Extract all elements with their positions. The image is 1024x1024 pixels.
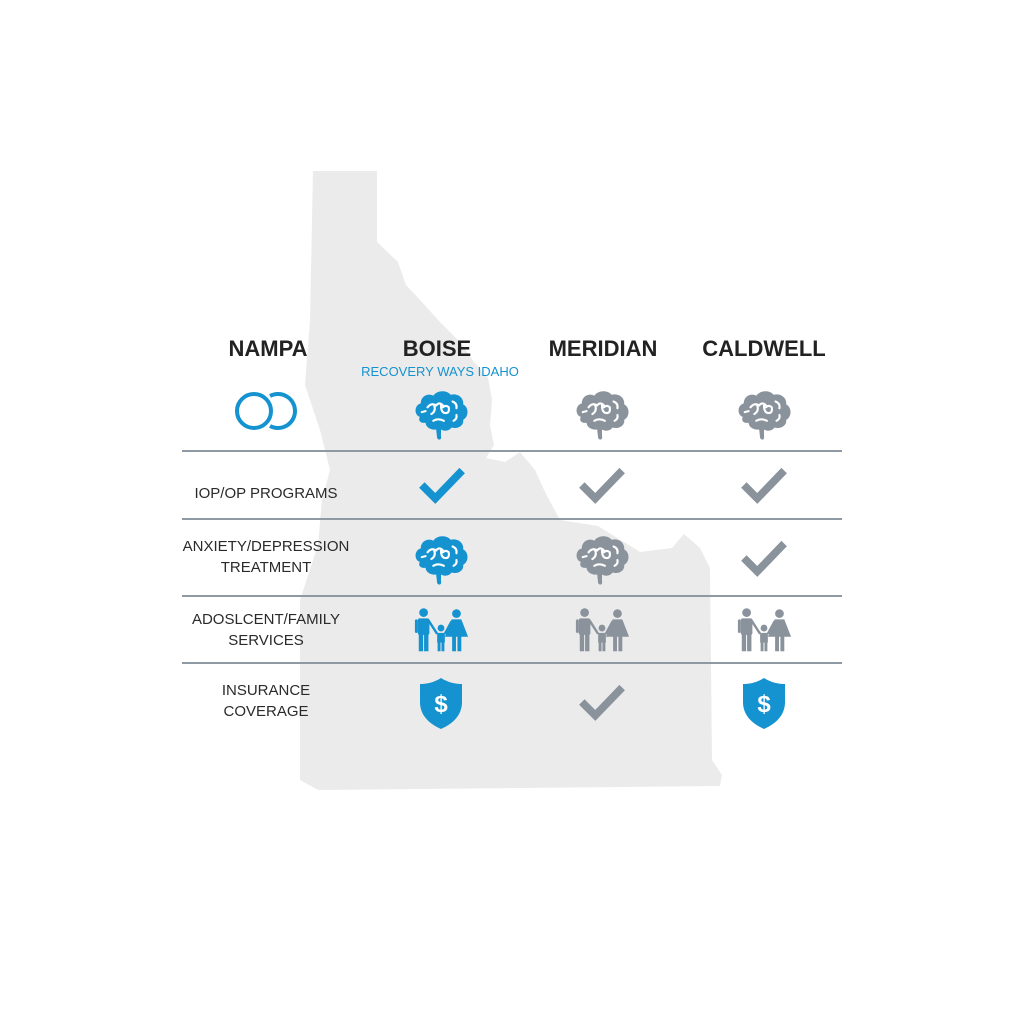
icon: boise family [414, 608, 468, 652]
icon: caldwell brain [738, 391, 790, 440]
icon: boise shield [420, 678, 462, 729]
icon: meridian check [579, 468, 625, 504]
heading: BOISE: BOISE [403, 336, 471, 361]
label: insurance [222, 682, 310, 720]
subheading: Recovery Ways Idaho: RECOVERY WAYS IDAHO [361, 364, 519, 379]
icon: meridian brain row [576, 536, 628, 585]
label: insurance: INSURANCE [222, 682, 310, 699]
label: adolescent/family: SERVICES [228, 632, 304, 649]
heading: MERIDIAN: MERIDIAN [549, 336, 657, 361]
icon: meridian family [576, 608, 629, 652]
icon: caldwell check row [741, 541, 787, 577]
label: anxiety/depression: TREATMENT [221, 559, 311, 576]
heading: NAMPA: NAMPA [228, 336, 308, 361]
icon: nampa rings [235, 392, 297, 430]
icon: boise check [419, 468, 465, 504]
label: adolescent/family [192, 611, 340, 649]
icon: boise brain [416, 391, 468, 440]
icon: caldwell check [741, 468, 787, 504]
label: anxiety/depression [182, 538, 349, 576]
icon: caldwell family [738, 608, 791, 652]
heading: CALDWELL: CALDWELL [702, 336, 826, 361]
label: anxiety/depression: ANXIETY/DEPRESSION [183, 538, 349, 555]
icon: boise brain row [416, 536, 468, 585]
label: adolescent/family: ADOSLCENT/FAMILY [192, 611, 340, 628]
label: IOP/OP programs: IOP/OP PROGRAMS [194, 485, 338, 502]
icon: caldwell shield [743, 678, 785, 729]
label: insurance: COVERAGE [223, 703, 309, 720]
icon: meridian check [579, 685, 625, 721]
icon: meridian brain [576, 391, 628, 440]
